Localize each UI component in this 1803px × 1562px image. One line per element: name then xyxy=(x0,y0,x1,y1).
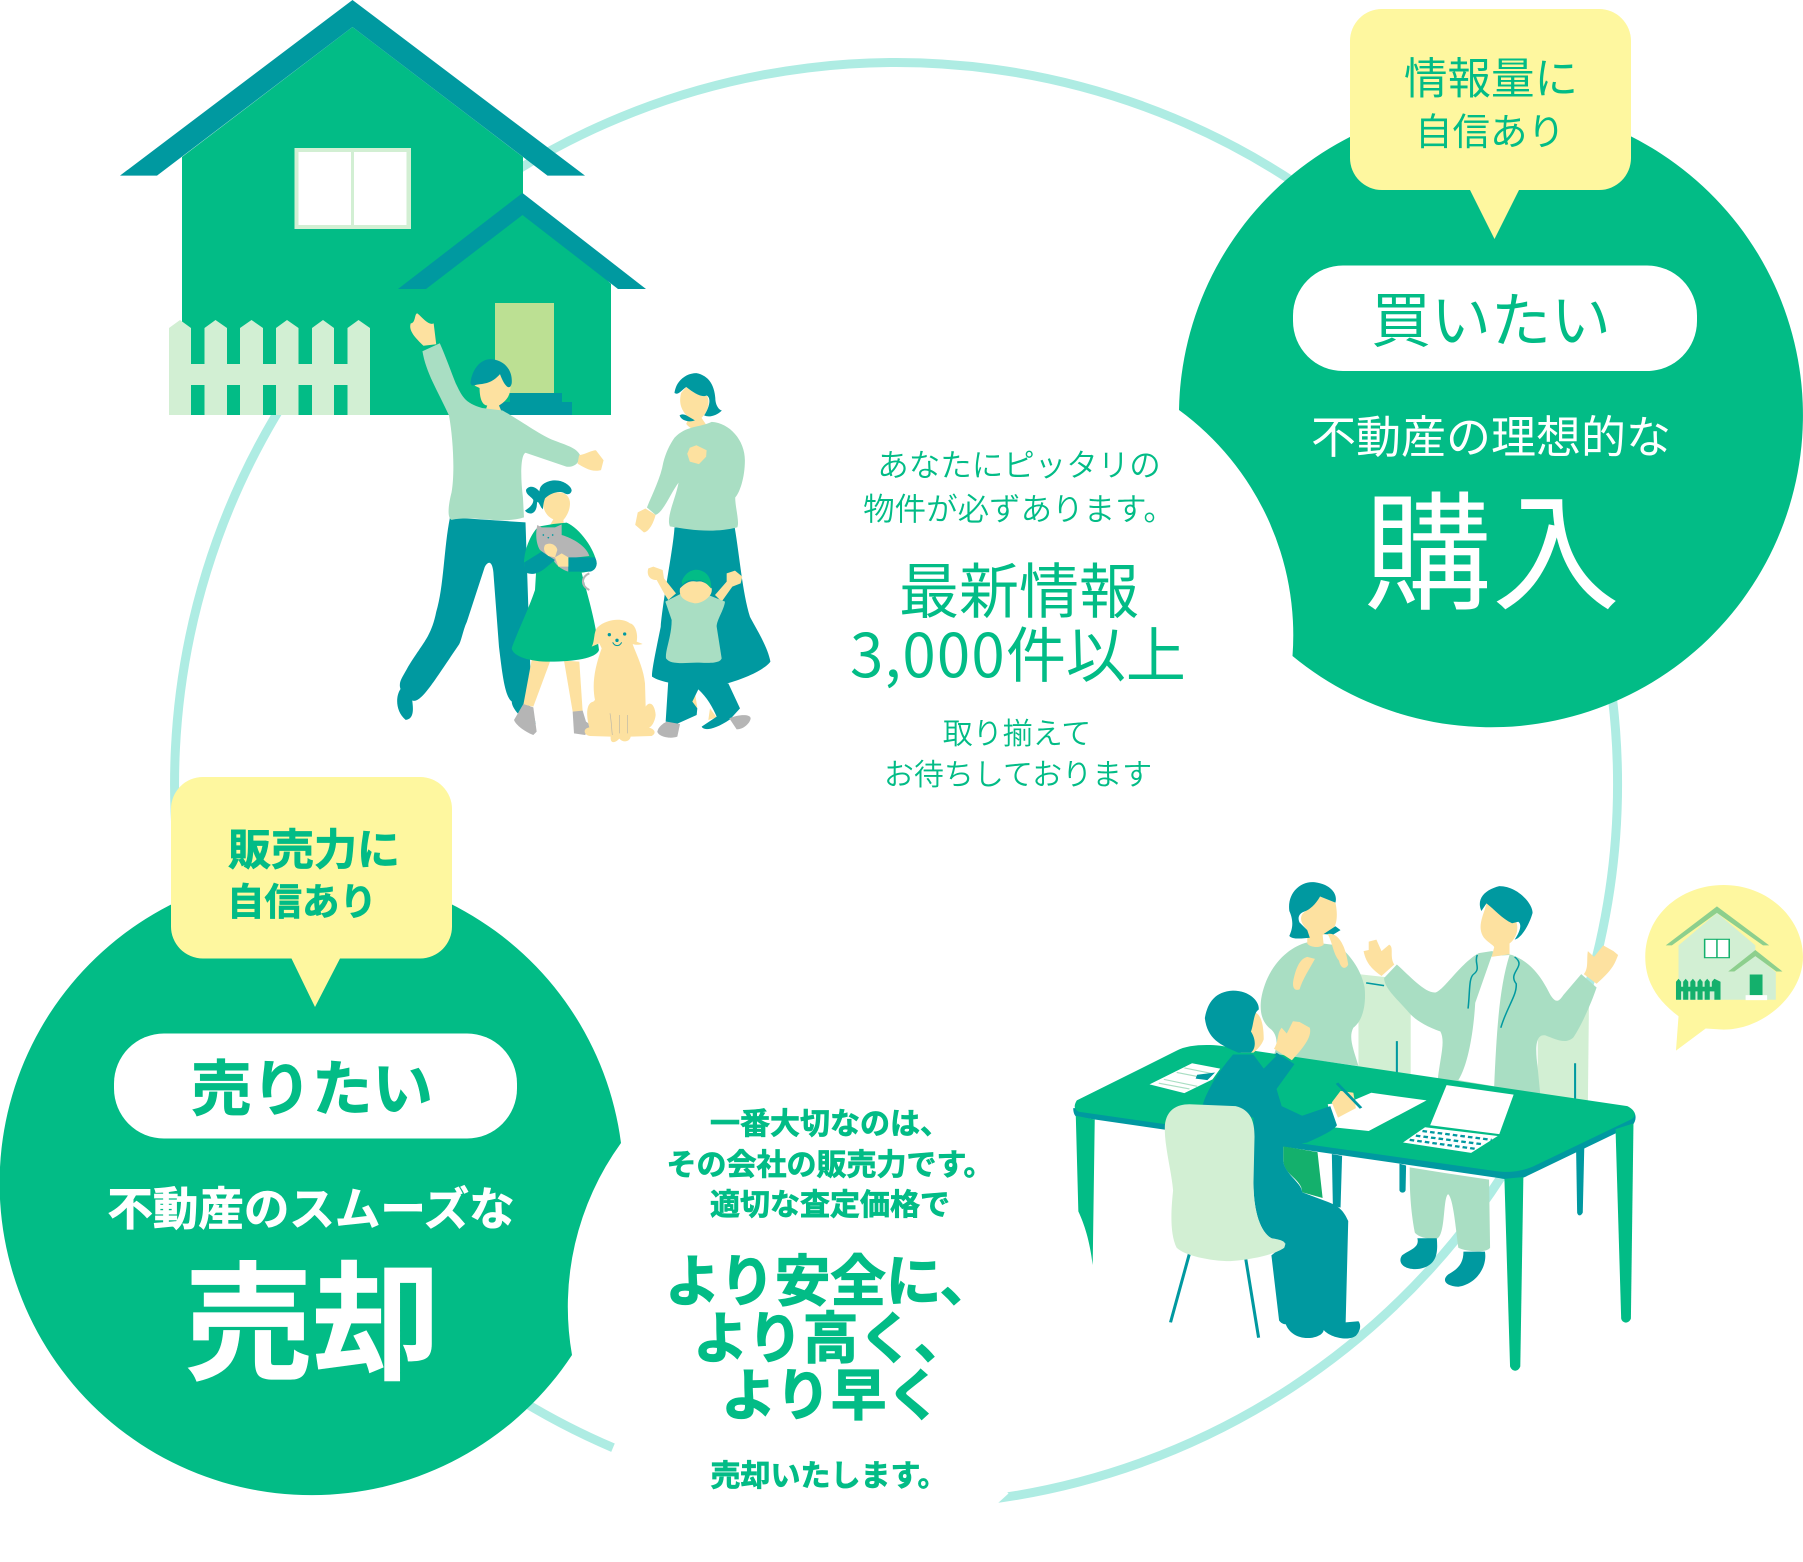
cycle ring xyxy=(175,63,1618,1510)
intro text line 3: 適切な査定価格で xyxy=(710,1180,950,1224)
panel: buy circle xyxy=(1179,9,1803,727)
seated person's trousers xyxy=(1283,1146,1323,1198)
speech bubble: information: 情報量に xyxy=(1404,44,1578,107)
closing text: 取り揃えて xyxy=(943,709,1091,753)
pill: want to sell: 売りたい xyxy=(191,1041,433,1128)
back table legs xyxy=(1332,1146,1584,1215)
table xyxy=(1073,1045,1636,1371)
pill: want to buy: 買いたい xyxy=(1371,273,1611,360)
pill: want to sell xyxy=(114,1034,517,1138)
speech bubble: information xyxy=(1350,9,1631,239)
sell circle background xyxy=(0,871,621,1495)
intro text: あなたにピッタリの xyxy=(877,440,1161,486)
document xyxy=(1150,1063,1220,1093)
closing text: 売却いたします。 xyxy=(710,1451,948,1495)
illustration: house xyxy=(120,0,646,415)
pill: want to buy xyxy=(1293,266,1697,371)
illustration: parents xyxy=(397,313,770,724)
subheading: buy: 不動産の理想的な xyxy=(1311,401,1671,466)
house body xyxy=(182,27,611,415)
wing roof xyxy=(398,193,646,289)
speech bubble: sales xyxy=(171,777,452,1007)
standing man xyxy=(1364,886,1618,1287)
speech bubble: sales: 自信あり xyxy=(227,871,377,926)
illustration: meeting xyxy=(1073,882,1803,1371)
back chairs xyxy=(1358,974,1589,1102)
intro text line 2: その会社の販売力です。 xyxy=(666,1140,994,1184)
intro text: 一番大切なのは、 xyxy=(710,1099,950,1143)
laptop xyxy=(1403,1085,1514,1153)
text block: sales power xyxy=(665,1099,995,1495)
door xyxy=(495,303,554,393)
fence xyxy=(169,320,370,415)
mother xyxy=(635,373,770,685)
seated man xyxy=(1202,991,1361,1339)
intro text line 2: 物件が必ずあります。 xyxy=(863,484,1175,530)
main roof xyxy=(120,0,585,176)
highlight: faster: より早く xyxy=(721,1351,942,1431)
steps xyxy=(497,393,572,415)
father xyxy=(397,313,604,724)
buy circle background xyxy=(1179,103,1803,727)
daughter with cat xyxy=(512,480,599,735)
dog xyxy=(585,620,656,742)
speech bubble: house xyxy=(1645,885,1803,1051)
speech bubble: sales: 販売力に xyxy=(228,816,400,878)
notepad xyxy=(1328,1093,1427,1131)
highlight: higher: より高く、 xyxy=(693,1294,969,1374)
lower wing wall xyxy=(426,215,611,415)
panel: sell circle xyxy=(0,777,621,1495)
heading: sale: 売却 xyxy=(184,1221,441,1406)
text block: property info xyxy=(850,440,1186,794)
speech bubble: information: 自信あり xyxy=(1415,101,1565,156)
subheading: sell: 不動産のスムーズな xyxy=(107,1173,515,1239)
heading: purchase: 購入 xyxy=(1364,451,1620,636)
highlight: safer: より安全に、 xyxy=(665,1237,995,1317)
closing text line 2: お待ちしております xyxy=(884,750,1152,794)
son xyxy=(648,567,751,738)
highlight: 3,000 listings: 3,000件以上 xyxy=(850,608,1186,695)
window xyxy=(294,148,411,229)
highlight: latest info: 最新情報 xyxy=(899,544,1139,631)
standing woman xyxy=(1261,882,1365,1066)
illustration: children and pets xyxy=(512,480,751,742)
seated chair xyxy=(1165,1104,1285,1338)
